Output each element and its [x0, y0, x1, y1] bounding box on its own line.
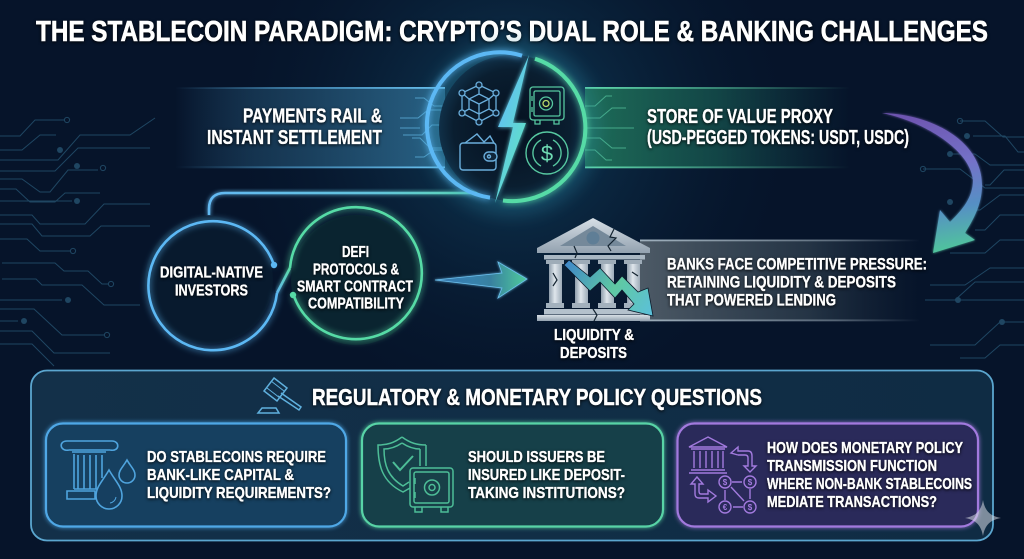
icon: wallet [460, 134, 497, 170]
icon: column and drops [61, 441, 135, 509]
heading: REGULATORY & MONETARY POLICY QUESTIONS [312, 384, 762, 410]
text: payments rail [207, 106, 382, 149]
text: insurance question: TAKING INSTITUTIONS? [468, 485, 625, 502]
text: capital question: DO STABLECOINS REQUIRE [147, 449, 326, 466]
panel: payments rail [175, 87, 445, 168]
icon: sparkle watermark [965, 500, 1001, 536]
text: digital-native investors [160, 264, 263, 300]
arrow: falling zigzag [564, 260, 653, 316]
text: banks pressure: RETAINING LIQUIDITY & DEPOSITS [667, 272, 896, 292]
label: liquidity and deposits: LIQUIDITY & [554, 327, 634, 344]
icon: bank and flows: $ [748, 503, 753, 512]
icon: shield and safe [378, 437, 453, 512]
text: capital question [147, 449, 331, 502]
text: insurance question: SHOULD ISSUERS BE [468, 449, 605, 466]
icon: bank and flows: $ [748, 478, 753, 487]
text: digital-native investors: DIGITAL-NATIVE [160, 264, 263, 282]
icon: dollar coin: $ [541, 141, 553, 166]
icon: safe [530, 87, 564, 124]
text: banks pressure: THAT POWERED LENDING [667, 290, 836, 310]
text: defi protocols: SMART CONTRACT [297, 278, 413, 296]
card: insurance [362, 424, 663, 526]
link between circles [277, 268, 290, 293]
panel: regulatory and monetary policy questions [31, 370, 993, 540]
connector line [209, 193, 505, 215]
arc: green [503, 59, 585, 201]
icon: dollar coin [526, 132, 568, 174]
text: insurance question [468, 449, 625, 502]
central hub circle [424, 40, 600, 216]
card: capital requirements [46, 424, 346, 526]
arrow: to bank [435, 262, 527, 298]
icon: bank and flows [689, 437, 756, 513]
icon: bank and flows: $ [723, 478, 728, 487]
text: monetary policy question: MEDIATE TRANSACTIONS? [767, 494, 937, 511]
icon: bank and flows: € [723, 503, 728, 512]
arc: blue [427, 52, 522, 198]
text: defi protocols: DEFI [342, 244, 369, 261]
curved arrow: store of value to banks [882, 113, 982, 253]
text: defi protocols: COMPATIBILITY [308, 296, 404, 312]
card: monetary policy [678, 424, 978, 526]
panel: banks face competitive pressure [640, 240, 927, 321]
text: store of value: STORE OF VALUE PROXY [647, 106, 833, 128]
icon: lightning bolt [495, 55, 529, 203]
text: defi protocols [297, 244, 413, 312]
icon: cracked bank with falling arrow [537, 218, 653, 321]
label: liquidity and deposits: DEPOSITS [560, 345, 627, 362]
label: liquidity and deposits [554, 327, 634, 362]
icon: network cube [459, 82, 499, 125]
text: insurance question: INSURED LIKE DEPOSIT- [468, 467, 625, 484]
circle: digital-native investors [145, 216, 277, 350]
text: defi protocols: PROTOCOLS & [313, 262, 399, 278]
text: payments rail: INSTANT SETTLEMENT [207, 127, 382, 149]
text: digital-native investors: INVESTORS [175, 282, 248, 300]
text: capital question: BANK-LIKE CAPITAL & [147, 467, 294, 484]
text: banks pressure [667, 254, 927, 310]
text: monetary policy question: HOW DOES MONETARY POLICY [767, 440, 963, 457]
text: monetary policy question [767, 440, 972, 511]
text: banks pressure: BANKS FACE COMPETITIVE PRESSURE: [667, 254, 927, 274]
text: store of value: (USD-PEGGED TOKENS: USDT, USDC) [647, 127, 909, 149]
circle: defi protocols [290, 207, 422, 345]
icon: gavel [258, 378, 301, 413]
text: store of value [647, 106, 909, 149]
panel: store of value [585, 87, 909, 168]
text: payments rail: PAYMENTS RAIL & [243, 106, 382, 128]
text: monetary policy question: TRANSMISSION FUNCTION [767, 458, 937, 475]
text: capital question: LIQUIDITY REQUIREMENTS? [147, 485, 331, 502]
